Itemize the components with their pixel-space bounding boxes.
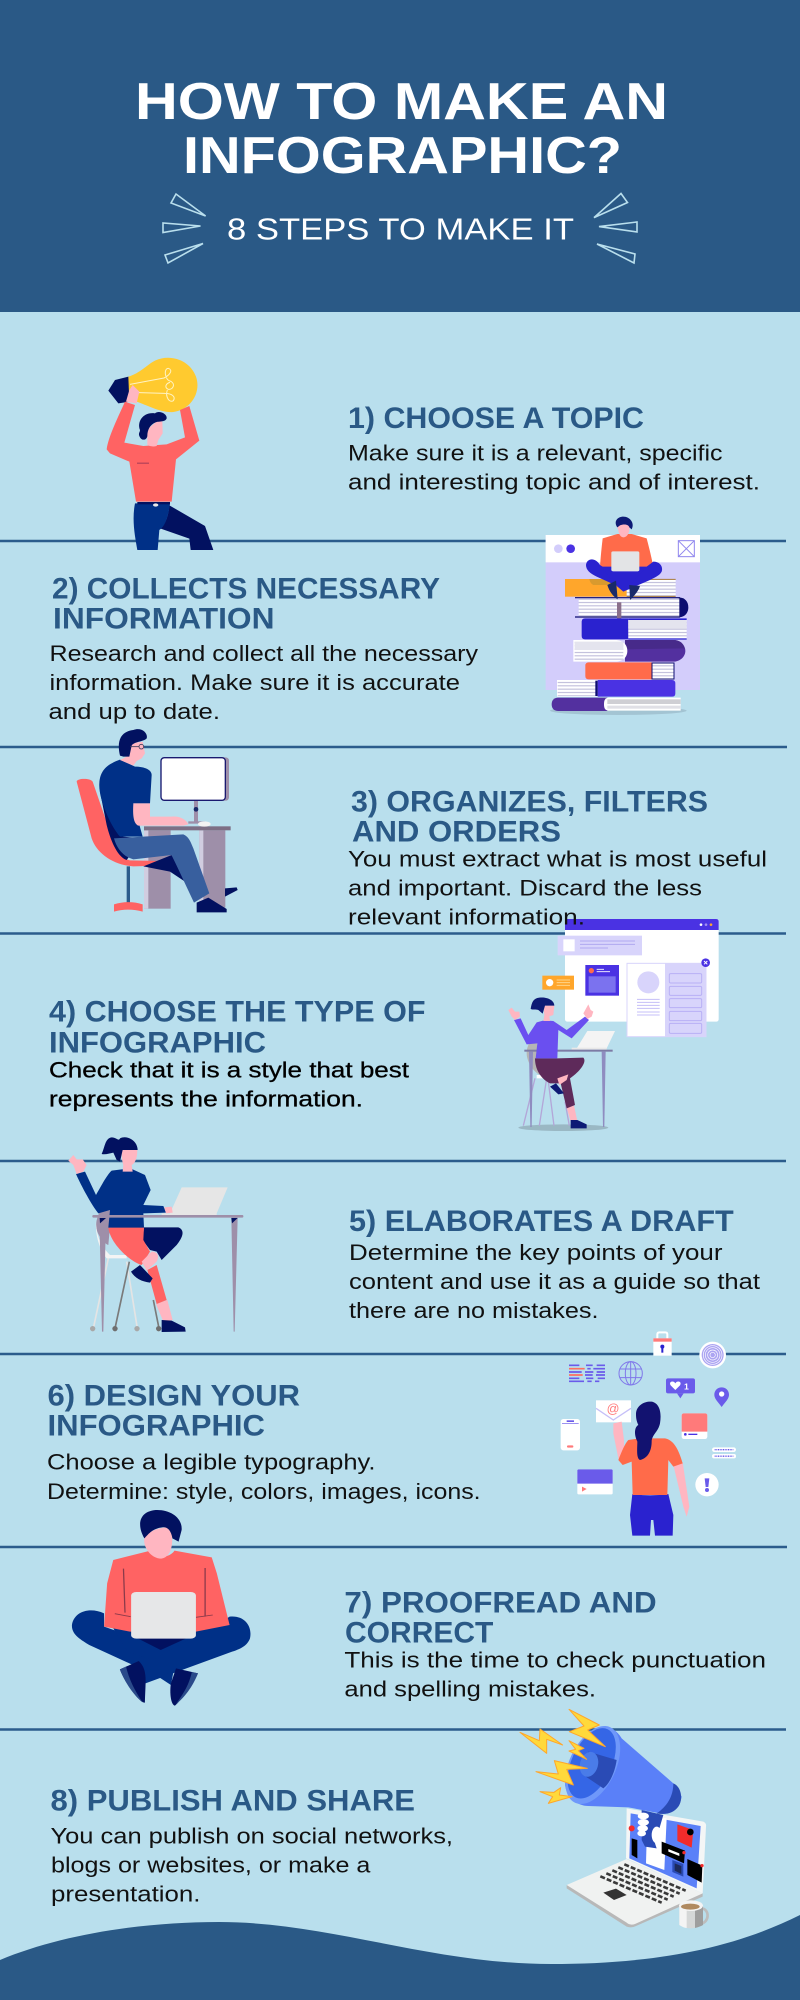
step 7 text: This is the time to check punctuation — [344, 1648, 766, 1673]
step 2 heading — [52, 572, 440, 635]
step 7 text — [344, 1648, 766, 1702]
step 5 heading: 5) ELABORATES A DRAFT — [349, 1205, 734, 1238]
title: INFOGRAPHIC? — [183, 127, 622, 185]
step 3 text — [348, 847, 767, 929]
title — [135, 73, 668, 185]
step 8 text — [50, 1824, 453, 1907]
step 3 heading: 3) ORGANIZES, FILTERS — [351, 786, 708, 819]
step 4 text: represents the information. — [49, 1087, 363, 1112]
step 1 text: and interesting topic and of interest. — [348, 470, 760, 495]
step 3 heading: AND ORDERS — [352, 816, 561, 849]
step 4 text — [49, 1058, 410, 1112]
illustration 7: person sitting cross-legged with laptop — [72, 1510, 250, 1706]
step 1 heading: 1) CHOOSE A TOPIC — [348, 402, 644, 435]
step 6 heading: 6) DESIGN YOUR — [48, 1379, 300, 1412]
step 1 text — [348, 441, 760, 495]
illustration 4: woman at desk with interface windows — [508, 919, 719, 1131]
step 7 heading: CORRECT — [345, 1616, 493, 1649]
step 5 text — [349, 1240, 761, 1323]
step 5 text: there are no mistakes. — [349, 1298, 598, 1323]
step 2 text: Research and collect all the necessary — [50, 641, 479, 666]
step 4 heading: 4) CHOOSE THE TYPE OF — [49, 996, 426, 1029]
step 6 heading — [48, 1379, 300, 1442]
step 2 text: and up to date. — [48, 699, 220, 724]
step 8 heading: 8) PUBLISH AND SHARE — [50, 1785, 415, 1818]
bottom wave — [0, 1915, 800, 2000]
step 8 text: presentation. — [51, 1882, 200, 1907]
step 2 text: information. Make sure it is accurate — [50, 670, 460, 695]
step 2 heading: INFORMATION — [53, 602, 274, 635]
step 3 text: and important. Discard the less — [348, 876, 702, 901]
illustration 1: man lifting a light bulb — [107, 358, 213, 550]
step 6 text: Choose a legible typography. — [47, 1450, 376, 1475]
step 7 text: and spelling mistakes. — [344, 1677, 596, 1702]
illustration 6: woman with floating app icons: @ — [607, 1402, 619, 1416]
step 1 text: Make sure it is a relevant, specific — [348, 441, 722, 466]
subtitle: 8 STEPS TO MAKE IT — [227, 212, 574, 246]
step 6 heading: INFOGRAPHIC — [48, 1409, 265, 1442]
illustration 8: megaphone and laptop — [520, 1709, 708, 1928]
title: HOW TO MAKE AN — [135, 73, 668, 131]
step 4 heading: INFOGRAPHIC — [49, 1026, 266, 1059]
step 8 text: You can publish on social networks, — [50, 1824, 453, 1849]
header band — [0, 0, 800, 312]
icon: right sparkle triangles — [594, 194, 637, 263]
step 3 heading — [351, 786, 708, 849]
step 4 heading — [49, 996, 426, 1059]
step 7 heading: 7) PROOFREAD AND — [344, 1587, 657, 1620]
illustration 3: man at a desktop computer — [77, 729, 238, 912]
illustration 6: woman with floating app icons — [561, 1332, 736, 1536]
step 2 text — [48, 641, 479, 724]
step 5 text: content and use it as a guide so that — [349, 1269, 761, 1294]
illustration 2: person on a stack of books — [546, 517, 700, 715]
step 6 text — [47, 1450, 481, 1504]
step 6 text: Determine: style, colors, images, icons. — [47, 1479, 481, 1504]
step 3 text: relevant information. — [348, 904, 585, 929]
step 4 text: Check that it is a style that best — [49, 1058, 410, 1083]
illustration 6: woman with floating app icons: 1 — [684, 1382, 689, 1392]
step 3 text: You must extract what is most useful — [348, 847, 767, 872]
step 5 text: Determine the key points of your — [349, 1240, 723, 1265]
step 8 text: blogs or websites, or make a — [51, 1853, 371, 1878]
step 2 heading: 2) COLLECTS NECESSARY — [52, 572, 440, 605]
step 7 heading — [344, 1587, 657, 1649]
illustration 5: woman at desk with laptop — [68, 1137, 243, 1332]
icon: left sparkle triangles — [163, 194, 206, 263]
